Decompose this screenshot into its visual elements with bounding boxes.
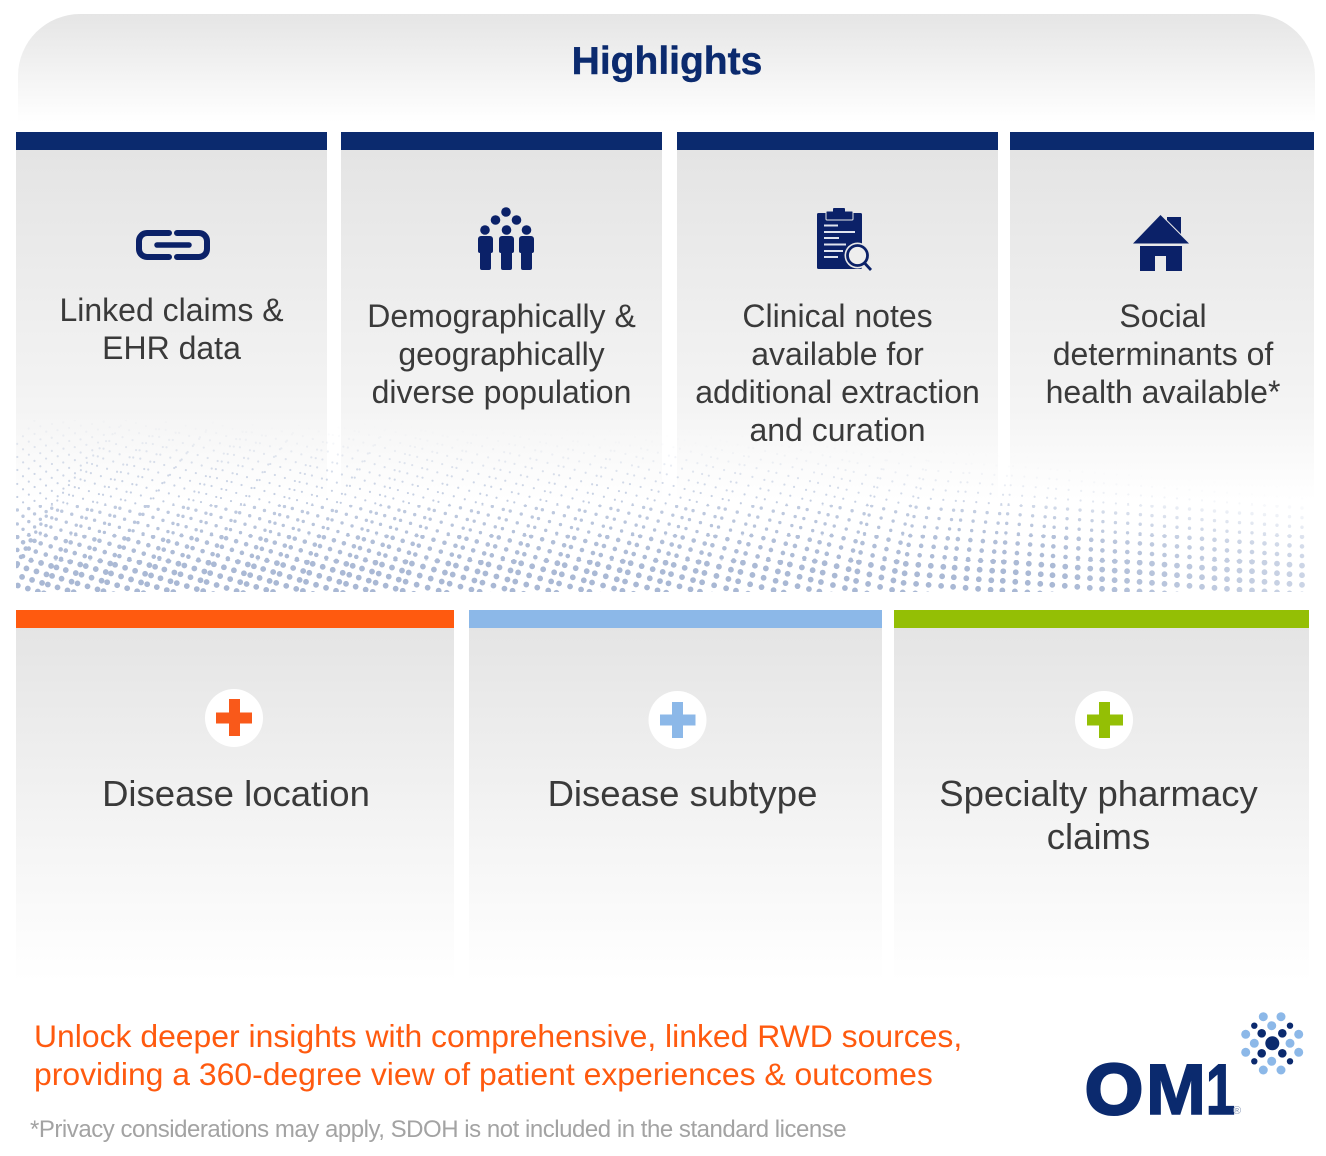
text: diverse population: geographically (398, 336, 605, 372)
text: diverse population: Demographically & (367, 298, 636, 334)
text: clinical notes: available for (751, 336, 924, 372)
text: linked claims (59, 292, 284, 366)
text: specialty pharmacy: Specialty pharmacy (939, 773, 1258, 814)
panel: linked claims (16, 132, 327, 500)
text: disease location: Disease location (102, 773, 370, 814)
icon: orange plus (205, 689, 263, 747)
icon: house (1133, 215, 1189, 271)
logo: OM1: O (1085, 1051, 1143, 1130)
title: Highlights (572, 40, 762, 83)
callout: Unlock deeper insights with comprehensive, linked RWD sources, (34, 1018, 962, 1054)
text: linked claims: Linked claims & (59, 292, 284, 328)
icon: blue plus (648, 691, 706, 749)
callout (34, 1018, 962, 1092)
icon: green plus (1075, 691, 1133, 749)
text: clinical notes: and curation (749, 412, 926, 448)
text: social determinants (1046, 298, 1280, 410)
text: linked claims: EHR data (102, 330, 241, 366)
panel: disease subtype (469, 610, 882, 982)
text: diverse population: diverse population (372, 374, 631, 410)
text: social determinants: Social (1119, 298, 1207, 334)
text: clinical notes (695, 298, 980, 448)
text: clinical notes: Clinical notes (742, 298, 933, 334)
panel: disease location (16, 610, 454, 982)
icon: people (478, 207, 534, 270)
header panel (18, 14, 1315, 122)
panel: diverse population (341, 132, 662, 500)
panel: specialty pharmacy (894, 610, 1309, 982)
icon: clipboard with magnifier (817, 208, 872, 271)
logo: OM1: 1 (1206, 1051, 1235, 1130)
panel: social determinants (1010, 132, 1314, 500)
logo: OM1: M (1146, 1051, 1206, 1130)
footnote: *Privacy considerations may apply, SDOH is not included in the standard license (30, 1116, 846, 1143)
dot wave pattern (16, 428, 1305, 592)
text: specialty pharmacy (939, 773, 1258, 857)
text: diverse population (367, 298, 636, 410)
text: social determinants: determinants of (1053, 336, 1273, 372)
logo: OM1: ® (1233, 1105, 1241, 1117)
panel: clinical notes (677, 132, 998, 500)
text: disease subtype: Disease subtype (548, 773, 817, 814)
icon: chain link (136, 230, 210, 260)
callout: providing a 360-degree view of patient experiences & outcomes (34, 1056, 933, 1092)
text: specialty pharmacy: claims (1047, 816, 1150, 857)
text: clinical notes: additional extraction (695, 374, 980, 410)
text: social determinants: health available* (1046, 374, 1280, 410)
